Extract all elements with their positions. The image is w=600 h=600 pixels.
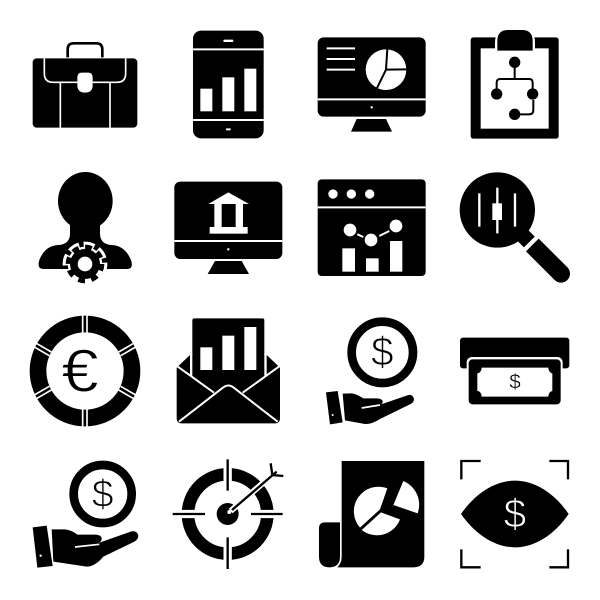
icon: banknote from slot [460,338,569,406]
icon: magnifier with candlestick [460,172,570,283]
icon: clipboard with flowchart [471,28,559,139]
icon: hand with dollar coin [326,322,414,424]
dollar sign: $ [504,491,526,537]
icon: document with pie chart [319,461,424,567]
euro sign: € [61,338,99,405]
icon: smartphone bar chart [193,31,264,138]
icon: browser window with charts [318,179,426,276]
dollar sign: $ [371,329,394,375]
icon: person with gear [39,172,132,282]
dollar sign: $ [92,472,114,516]
icon: envelope with chart [177,318,280,423]
icon: monitor with pie chart [318,37,426,132]
icon: eye with dollar [461,461,569,567]
dollar sign: $ [509,370,521,393]
icon: briefcase [33,43,137,128]
icon: euro donut [34,313,136,428]
icon: target with arrow [170,457,285,572]
icon: large hand with dollar coin [33,465,138,568]
icon: monitor with bank [174,182,282,274]
